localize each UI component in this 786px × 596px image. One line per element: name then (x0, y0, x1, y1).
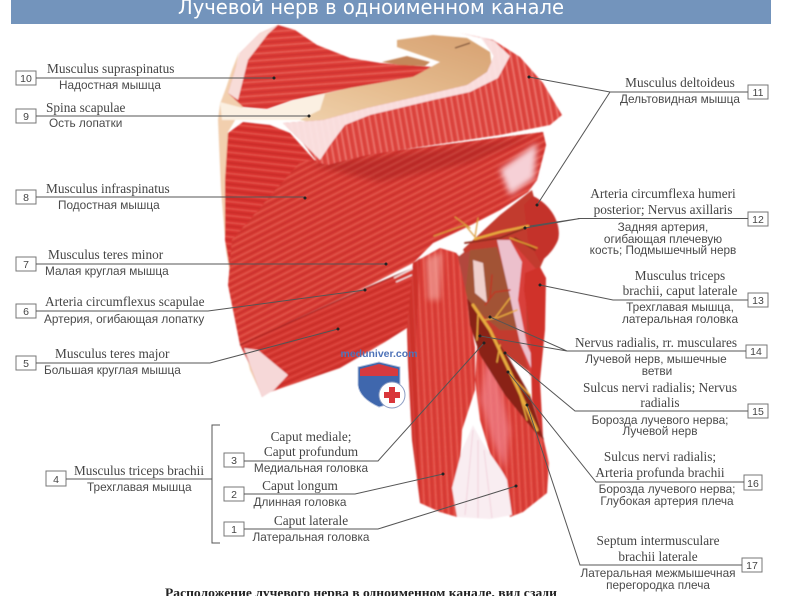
label 6: circumflex scapular artery: Артерия, огибающая лопатку (44, 312, 204, 326)
label 16: radial sulcus, deep brachial artery: Arteria profunda brachii (595, 465, 725, 480)
label 12: circumflex humeral artery, axillary nerve: Задняя артерия, (618, 220, 708, 234)
label 6: circumflex scapular artery (16, 288, 366, 326)
title bar (11, 0, 771, 24)
label 9: spina scapulae (16, 100, 310, 130)
label 14: radial nerve muscular branches: Nervus radialis, rr. musculares (575, 335, 737, 350)
watermark logo: meduniver.com (340, 348, 418, 408)
label 12: circumflex humeral artery, axillary nerve (524, 186, 768, 257)
label 4: triceps brachii with bracket (46, 425, 220, 543)
label 8: infraspinatus (16, 181, 306, 212)
anatomical illustration: shoulder and arm muscles (218, 25, 562, 519)
humerus and deep structures (457, 190, 548, 380)
label 11: deltoid (528, 75, 768, 206)
label 3: medial head (224, 342, 486, 475)
spine of scapula and acromion (220, 35, 492, 124)
label 10: supraspinatus: Надостная мышца (59, 78, 161, 92)
label 16: radial sulcus, deep brachial artery (506, 370, 762, 508)
label 17: lateral intermuscular septum (526, 404, 762, 592)
label 7: teres minor: 7 (23, 259, 29, 271)
label 11: deltoid: Musculus deltoideus (625, 75, 735, 90)
label 5: teres major: 5 (23, 358, 29, 370)
label 15: radial sulcus, radial nerve: 15 (752, 406, 764, 418)
label 17: lateral intermuscular septum: brachii laterale (618, 549, 698, 564)
teres minor cut end (524, 196, 559, 262)
label 9: spina scapulae: 9 (23, 111, 29, 123)
label 16: radial sulcus, deep brachial artery: Борозда лучевого нерва; (599, 482, 735, 496)
purple tendon (510, 240, 540, 380)
label 1: lateral head: 1 (231, 524, 237, 536)
deltoid (283, 33, 562, 165)
label 15: radial sulcus, radial nerve: Лучевой нерв (623, 424, 697, 438)
label 7: teres minor: Малая круглая мышца (45, 264, 169, 278)
nerves and arteries (434, 217, 537, 430)
label 6: circumflex scapular artery: 6 (23, 306, 29, 318)
label 3: medial head: Caput mediale; (271, 429, 351, 444)
label 12: circumflex humeral artery, axillary nerve: 12 (752, 214, 764, 226)
label 1: lateral head (224, 484, 518, 544)
label 13: triceps lateral head: 13 (752, 295, 764, 307)
label 16: radial sulcus, deep brachial artery: Глубокая артерия плеча (600, 494, 734, 508)
label 17: lateral intermuscular septum: Латеральная межмышечная (580, 566, 736, 580)
label 8: infraspinatus: Musculus infraspinatus (46, 181, 170, 196)
label 16: radial sulcus, deep brachial artery: Sulcus nervi radialis; (604, 449, 716, 464)
label 14: radial nerve muscular branches: 14 (750, 346, 762, 358)
label 4: triceps brachii with bracket: Трехглавая мышца (87, 480, 192, 494)
label 12: circumflex humeral artery, axillary nerve: кость; Подмышечный нерв (590, 243, 736, 257)
label 15: radial sulcus, radial nerve: radialis (640, 395, 680, 410)
label 9: spina scapulae: Spina scapulae (46, 100, 125, 115)
label 2: long head (224, 472, 444, 509)
label 2: long head: Длинная головка (254, 495, 347, 509)
label 13: triceps lateral head: brachii, caput laterale (623, 283, 737, 298)
label 14: radial nerve muscular branches: Лучевой нерв, мышечные (585, 352, 727, 366)
radial groove (467, 298, 544, 440)
label 13: triceps lateral head (538, 268, 768, 326)
label 6: circumflex scapular artery: Arteria circumflexus scapulae (45, 294, 205, 309)
label 5: teres major (16, 328, 340, 377)
label 1: lateral head: Caput laterale (274, 513, 348, 528)
label 15: radial sulcus, radial nerve: Sulcus nervi radialis; Nervus (583, 380, 737, 395)
label 3: medial head: Медиальная головка (254, 461, 369, 475)
label 4: triceps brachii with bracket: 4 (53, 474, 59, 486)
label 8: infraspinatus: 8 (23, 192, 29, 204)
label 2: long head: Caput longum (262, 478, 339, 493)
white gap (452, 241, 464, 256)
label 9: spina scapulae: Ость лопатки (49, 116, 122, 130)
label 7: teres minor: Musculus teres minor (48, 247, 164, 262)
label 14: radial nerve muscular branches (478, 316, 767, 378)
label 13: triceps lateral head: Musculus triceps (635, 268, 725, 283)
label 1: lateral head: Латеральная головка (253, 530, 370, 544)
triceps lateral head, lower part (475, 347, 549, 517)
label 15: radial sulcus, radial nerve (504, 352, 768, 438)
label 3: medial head: 3 (231, 455, 237, 467)
label 10: supraspinatus (16, 61, 276, 92)
label 12: circumflex humeral artery, axillary nerve: posterior; Nervus axillaris (594, 202, 732, 217)
label 7: teres minor (16, 247, 388, 278)
label 17: lateral intermuscular septum: 17 (746, 560, 758, 572)
triceps tendon, white fan (452, 425, 512, 519)
label 14: radial nerve muscular branches: ветви (642, 364, 672, 378)
watermark logo: meduniver.com: meduniver.com (340, 348, 418, 360)
infraspinatus (225, 122, 546, 305)
lateral head, cut upper piece (524, 267, 546, 437)
triceps long head (407, 248, 475, 517)
label 17: lateral intermuscular septum: перегородка плеча (606, 578, 710, 592)
label 16: radial sulcus, deep brachial artery: 16 (747, 478, 759, 490)
label 10: supraspinatus: Musculus supraspinatus (47, 61, 174, 76)
supraspinatus (228, 25, 433, 109)
label 10: supraspinatus: 10 (20, 73, 32, 85)
teres major (240, 268, 417, 397)
label 3: medial head: Caput profundum (264, 444, 359, 459)
label 12: circumflex humeral artery, axillary nerve: Arteria circumflexa humeri (590, 186, 736, 201)
label 8: infraspinatus: Подостная мышца (58, 198, 160, 212)
label 12: circumflex humeral artery, axillary nerve: огибающая плечевую (604, 232, 722, 246)
label 5: teres major: Musculus teres major (55, 346, 170, 361)
label 11: deltoid: 11 (753, 87, 764, 99)
scapula margin (218, 52, 264, 396)
label 5: teres major: Большая круглая мышца (44, 363, 181, 377)
label 17: lateral intermuscular septum: Septum intermusculare (597, 533, 720, 548)
icon: medical shield (358, 362, 405, 408)
label 13: triceps lateral head: латеральная головка (622, 312, 738, 326)
label 15: radial sulcus, radial nerve: Борозда лучевого нерва; (592, 413, 728, 427)
label 2: long head: 2 (231, 489, 237, 501)
label 13: triceps lateral head: Трехглавая мышца, (626, 300, 734, 314)
label 11: deltoid: Дельтовидная мышца (620, 92, 740, 106)
label 4: triceps brachii with bracket: Musculus triceps brachii (74, 463, 204, 478)
